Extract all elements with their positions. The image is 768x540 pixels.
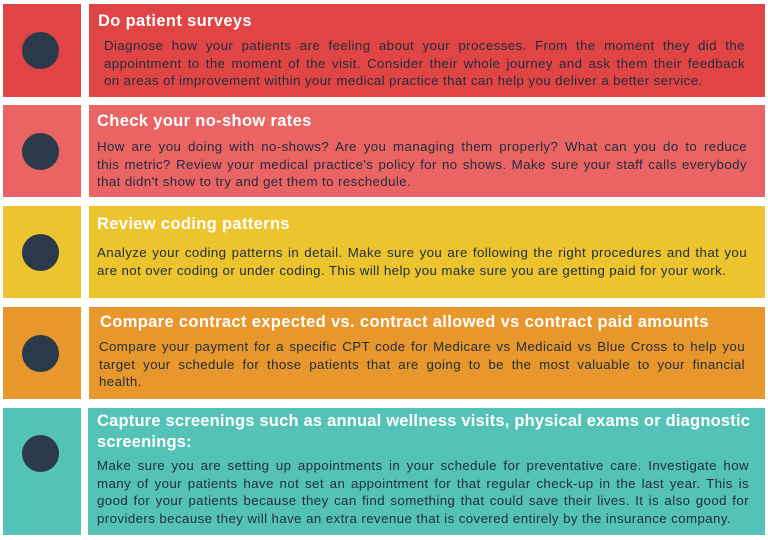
panel: compare contract: health. <box>99 374 142 389</box>
panel: do patient surveys <box>89 4 765 97</box>
panel: compare contract: Compare your payment for a specific CPT code for Medicare vs Medicaid vs Blue Cross to help you <box>99 339 745 354</box>
panel: do patient surveys: Do patient surveys <box>98 12 252 30</box>
panel: capture screenings: screenings: <box>97 433 192 451</box>
row 1 icon <box>3 4 81 97</box>
panel: no-show rates: Check your no-show rates <box>97 112 312 130</box>
panel: compare contract: target your schedule for those patients that are going to be the most valuable to your financial <box>99 356 745 372</box>
panel: do patient surveys: appointment to the moment of the visit. Consider their whole journey and ask them their feedback <box>104 56 745 70</box>
panel: capture screenings: many of your patients have not set an appointment for that regular check-up in the last year. This is <box>97 476 749 490</box>
panel: coding patterns: Analyze your coding patterns in detail. Make sure you are following the right procedures and that you <box>97 245 747 260</box>
panel: capture screenings: Capture screenings such as annual wellness visits, physical exams or diagnostic <box>97 412 750 430</box>
panel: coding patterns <box>89 206 765 298</box>
panel: no-show rates: this metric? Review your medical practice's policy for no shows. Make sure your staff calls everybody <box>97 156 747 172</box>
panel: capture screenings: providers because they will have an extra revenue that is covered entirely by the insurance company. <box>97 510 731 526</box>
panel: do patient surveys: on areas of improvement within your medical practice that can help you deliver a better service. <box>104 73 703 88</box>
panel: capture screenings: good for your patients because they can find something that could save their lives. It is also good for <box>97 493 749 508</box>
panel: do patient surveys: Diagnose how your patients are feeling about your processes. From the moment they did the <box>104 38 745 53</box>
panel: coding patterns: are not over coding or under coding. This will help you make sure you are getting paid for your work. <box>97 262 726 278</box>
panel: no-show rates <box>89 105 765 197</box>
row 5 icon <box>3 408 81 535</box>
row 3 icon <box>3 206 81 298</box>
panel: coding patterns: Review coding patterns <box>97 215 290 233</box>
panel: compare contract <box>89 307 765 399</box>
row 2 icon <box>3 105 81 197</box>
panel: no-show rates: that didn't show to try and get them to reschedule. <box>97 174 411 189</box>
panel: capture screenings: Make sure you are setting up appointments in your schedule for preventative care. Investigate how <box>97 458 749 473</box>
panel: compare contract: Compare contract expected vs. contract allowed vs contract paid amounts <box>100 313 709 331</box>
panel: capture screenings <box>88 408 765 535</box>
row 4 icon <box>3 307 81 399</box>
panel: no-show rates: How are you doing with no-shows? Are you managing them properly? What can you do to reduce <box>97 139 747 154</box>
